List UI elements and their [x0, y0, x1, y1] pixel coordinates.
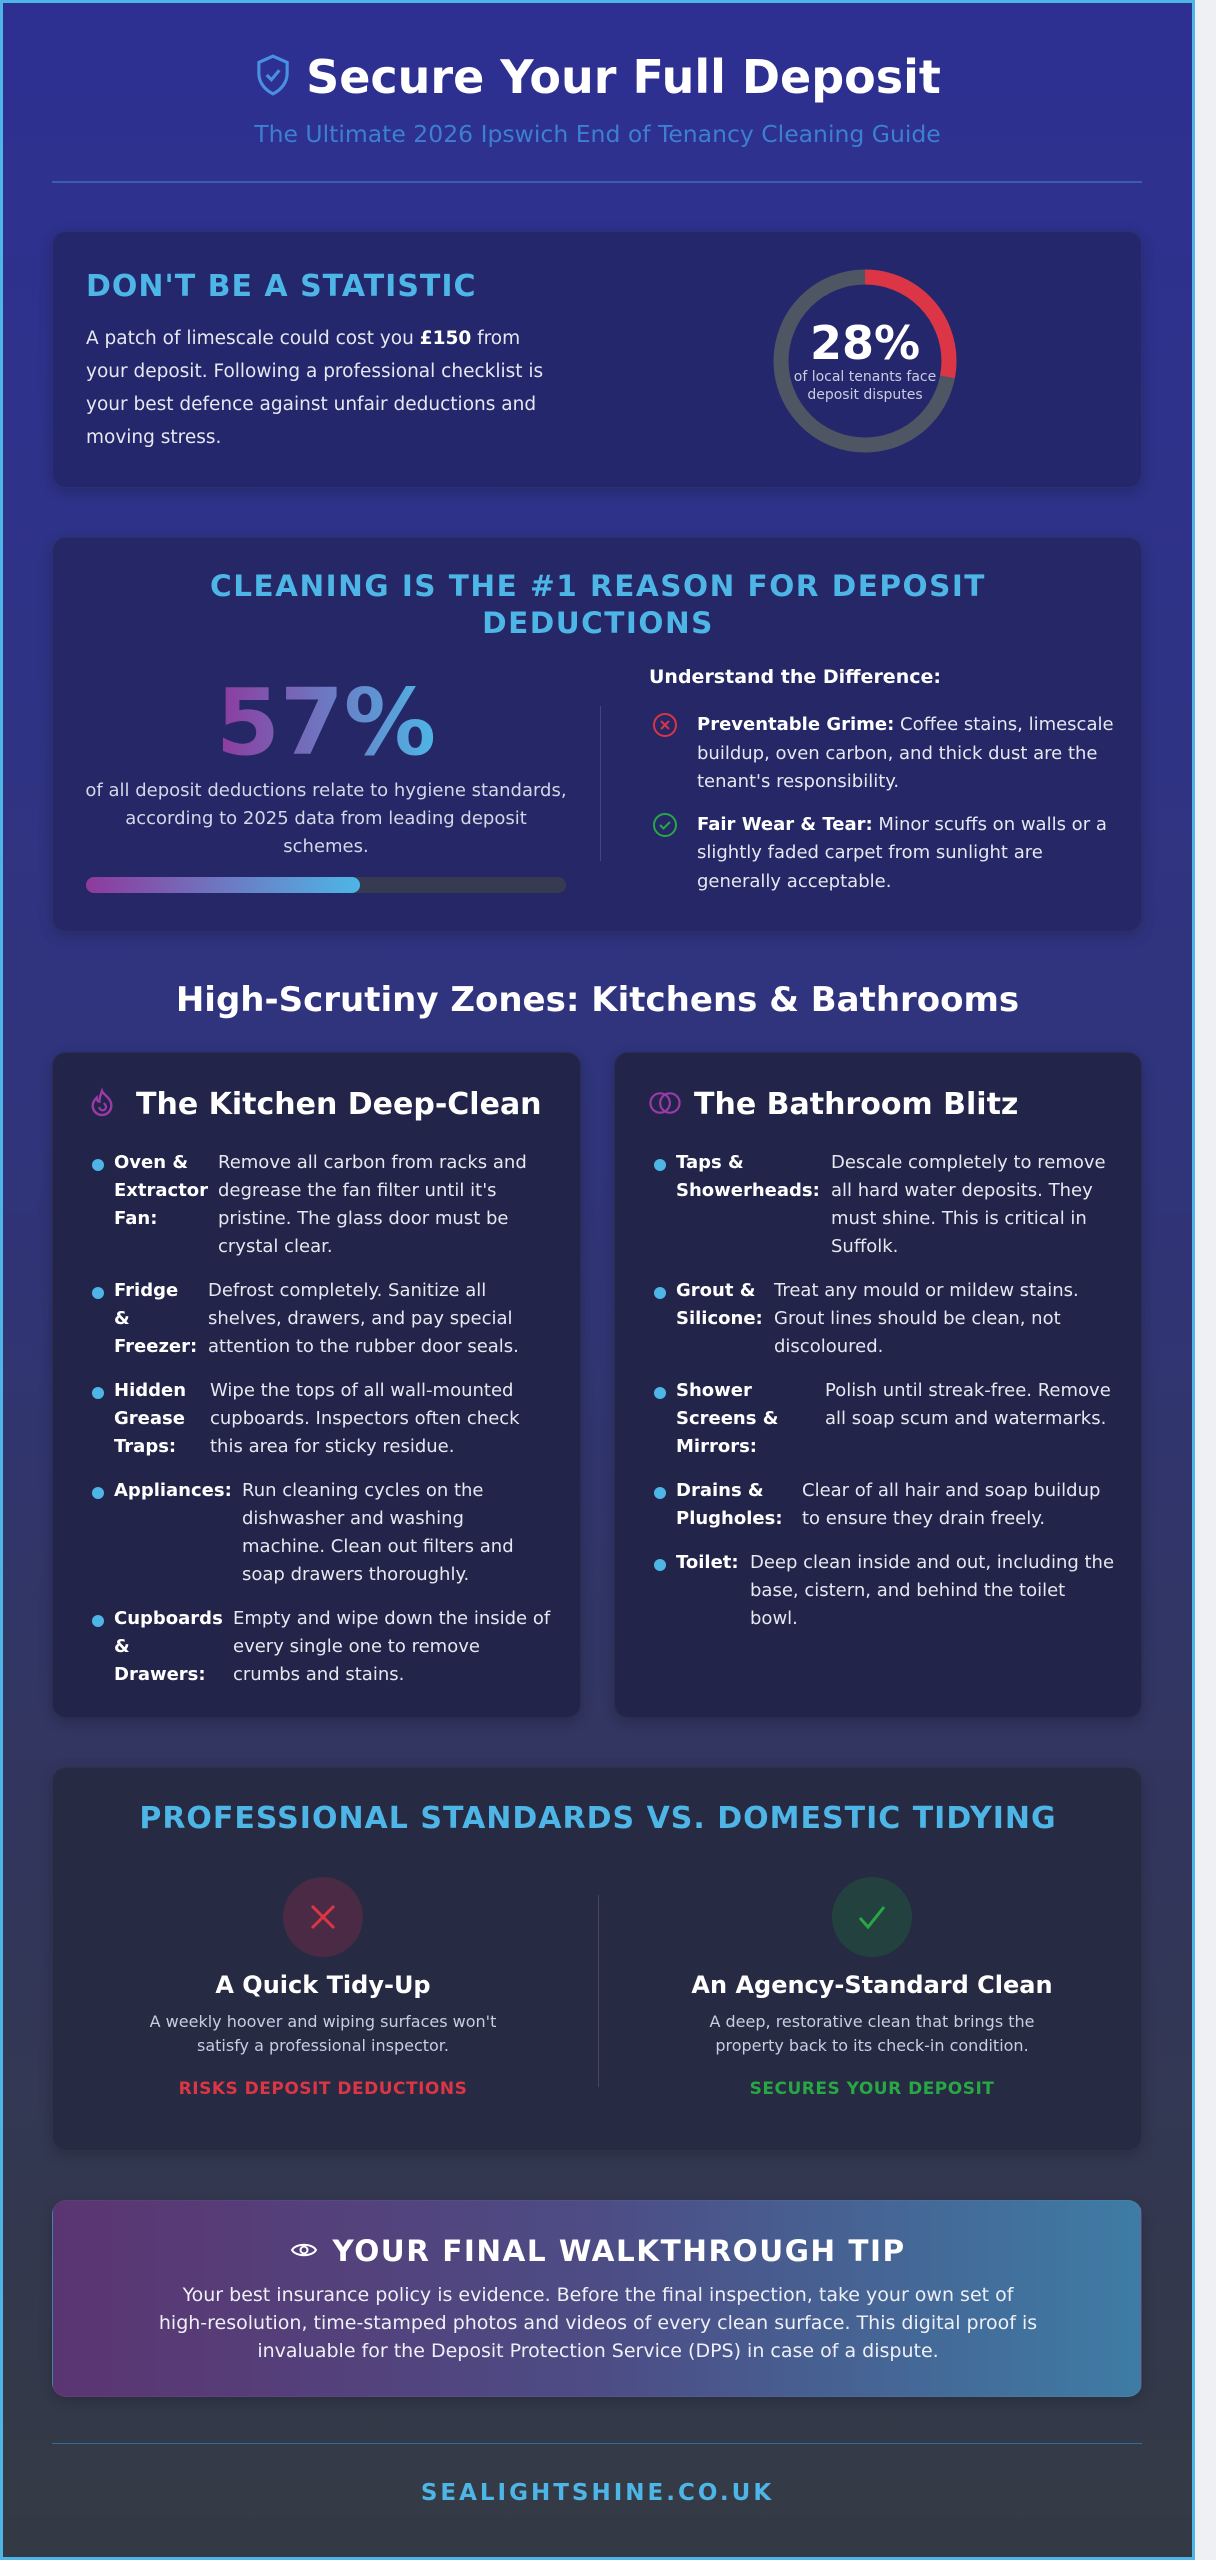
item: appliances: machine. Clean out filters and [242, 1536, 514, 1557]
item: grease traps: Wipe the tops of all wall-mounted cupboards. Inspectors often check this area for sticky residue. [210, 1380, 520, 1457]
item: shower screens [654, 1380, 1111, 1457]
item: fridge: Defrost completely. Sanitize all shelves, drawers, and pay special attention to the rubber door seals. [208, 1280, 519, 1357]
item: grease traps: Hidden Grease Traps: [114, 1380, 186, 1457]
heading [210, 569, 986, 640]
heading: YOUR FINAL WALKTHROUGH TIP [332, 2234, 906, 2268]
icon: x [283, 1877, 363, 1957]
tag: RISKS DEPOSIT DEDUCTIONS [179, 2079, 467, 2099]
text block: Your best insurance policy is evidence. Before the final inspection, take your own set of high‑resolution, time-stamped photos and videos of every clean surface. This digital proof is invaluable for the Deposit Protection Service (DPS) in case of a dispute. [159, 2284, 1037, 2362]
column: agency-standard clean [691, 1877, 1053, 2099]
item: taps: Descale completely to remove all hard water deposits. They must shine. This is critical in Suffolk. [831, 1152, 1106, 1257]
item: grout: Grout & Silicone: [676, 1280, 763, 1329]
item: toilet: Toilet: [676, 1552, 739, 1573]
panel: don't be a statistic [52, 231, 1142, 488]
card title: The Kitchen Deep-Clean [136, 1087, 542, 1122]
item: drains: Drains & Plugholes: [676, 1480, 783, 1529]
donut chart: 28% [774, 270, 956, 452]
description: A weekly hoover and wiping surfaces won't [150, 2012, 496, 2031]
heading: high-scrutiny zones: High-Scrutiny Zones: Kitchens & Bathrooms [176, 980, 1019, 1020]
item: drains: Clear of all hair and soap buildup to ensure they drain freely. [802, 1480, 1100, 1529]
stat caption: of all deposit deductions relate to hygiene standards, according to 2025 data from leading deposit schemes. [85, 780, 567, 857]
item: toilet: Deep clean inside and out, including the base, cistern, and behind the toilet bowl. [750, 1552, 1114, 1629]
right column: understand the difference [649, 666, 1114, 892]
item: oven: Oven & Extractor Fan: [114, 1152, 208, 1229]
description: property back to its check-in condition. [715, 2036, 1029, 2055]
item: shower screens: Shower Screens & Mirrors: [676, 1380, 778, 1457]
title: Secure Your Full Deposit [306, 50, 941, 104]
item: taps: Taps & Showerheads: [676, 1152, 820, 1201]
item: shower screens: Polish until streak-free. Remove all soap scum and watermarks. [825, 1380, 1111, 1429]
card title: The Bathroom Blitz [694, 1087, 1018, 1122]
item: cupboards: every single one to remove [233, 1636, 480, 1657]
item: appliances [92, 1480, 514, 1585]
description: A deep, restorative clean that brings the [709, 2012, 1035, 2031]
heading: CLEANING IS THE #1 REASON FOR DEPOSIT [210, 569, 986, 603]
item: taps [654, 1152, 1106, 1257]
item: oven: Remove all carbon from racks and degrease the fan filter until it's pristine. The glass door must be crystal clear. [218, 1152, 527, 1257]
heading: PROFESSIONAL STANDARDS VS. DOMESTIC TIDYING [139, 1801, 1057, 1836]
text block: A patch of limescale could cost you £150 from your deposit. Following a professional checklist is your best defence against unfair deductions and moving stress. [86, 328, 543, 448]
panel: cleaning is #1 reason [52, 537, 1142, 932]
item: grout: Treat any mould or mildew stains. Grout lines should be clean, not discoloured. [774, 1280, 1079, 1357]
item: appliances: soap drawers thoroughly. [242, 1564, 469, 1585]
item: preventable grime: Preventable Grime: Coffee stains, limescale buildup, oven carbon, and thick dust are the tenant's responsibility. [697, 714, 1114, 792]
icon: bubbles [649, 1092, 681, 1114]
item: appliances: dishwasher and washing [242, 1508, 464, 1529]
item: cupboards: Empty and wipe down the inside of [233, 1608, 550, 1629]
column: quick tidy-up [150, 1877, 496, 2099]
tag: SECURES YOUR DEPOSIT [750, 2079, 994, 2099]
callout: final walkthrough tip [52, 2200, 1142, 2397]
description [709, 2012, 1035, 2055]
title: An Agency-Standard Clean [691, 1971, 1053, 1999]
heading: DEDUCTIONS [482, 606, 714, 640]
subtitle: The Ultimate 2026 Ipswich End of Tenancy Cleaning Guide [254, 120, 941, 148]
icon: shield [257, 54, 289, 96]
checklist [92, 1152, 551, 1685]
panel: kitchen [52, 1052, 581, 1718]
item: appliances: Run cleaning cycles on the [242, 1480, 484, 1501]
title: A Quick Tidy-Up [215, 1971, 431, 1999]
heading: DON'T BE A STATISTIC [86, 269, 477, 304]
item: cupboards: crumbs and stains. [233, 1664, 404, 1685]
item: cupboards: Cupboards & Drawers: [114, 1608, 223, 1685]
description: satisfy a professional inspector. [197, 2036, 449, 2055]
progress bar [86, 877, 566, 893]
donut chart: 28%: of local tenants face [794, 369, 936, 385]
donut chart: 28%: deposit disputes [807, 387, 923, 403]
item: fair wear: Fair Wear & Tear: Minor scuffs on walls or a slightly faded carpet from sunlight are generally acceptable. [697, 814, 1107, 892]
panel: professional vs domestic [52, 1767, 1142, 2151]
panel: bathroom [614, 1052, 1142, 1718]
footer: SEALIGHTSHINE.CO.UK [421, 2480, 774, 2506]
description [150, 2012, 496, 2055]
icon: flame [92, 1088, 112, 1116]
icon: x circle [653, 713, 677, 737]
subheading: Understand the Difference: [649, 666, 941, 688]
stat: 57%: 57% [216, 669, 436, 776]
item: fridge: Fridge & Freezer: [114, 1280, 197, 1357]
item: drains [654, 1480, 1100, 1529]
icon: eye [290, 2244, 318, 2256]
icon: check circle [653, 813, 677, 837]
item: cupboards [92, 1608, 551, 1685]
icon: check [832, 1877, 912, 1957]
checklist [654, 1152, 1114, 1629]
donut chart: 28%: 28% [810, 316, 920, 370]
item: appliances: Appliances: [114, 1480, 232, 1501]
